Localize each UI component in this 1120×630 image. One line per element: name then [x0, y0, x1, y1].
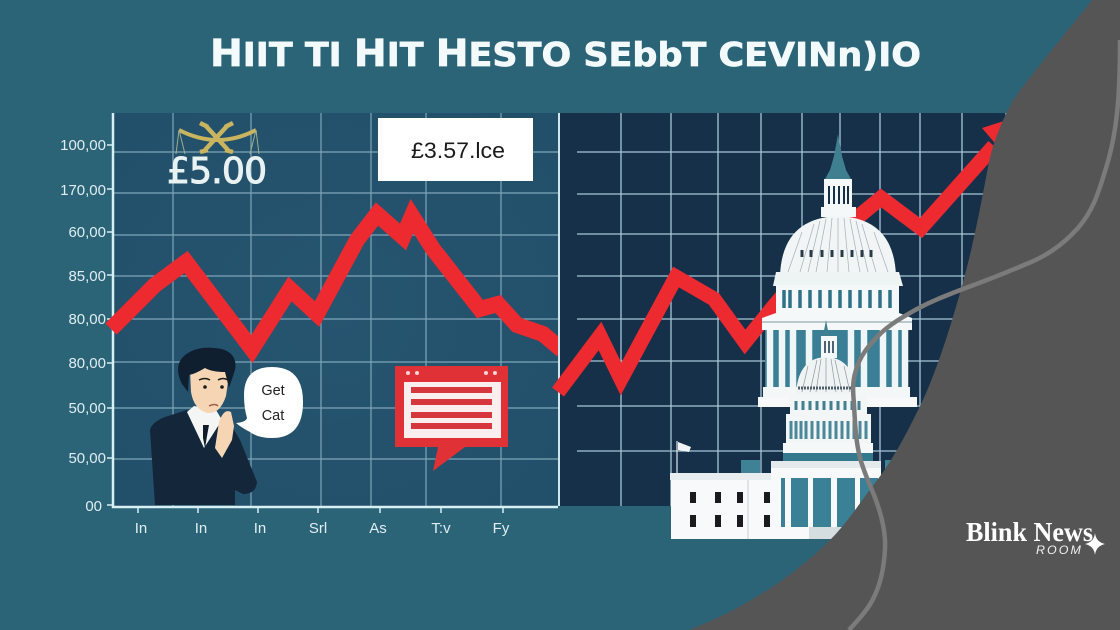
- y axis labels: 50,00: [68, 400, 106, 417]
- price box: £3.57.lce: [411, 138, 505, 163]
- red arrow: rising: [558, 120, 1007, 392]
- title: HIIT TI HIT HESTO SEbbT CEVINn)IO: [210, 32, 921, 75]
- y axis labels: 80,00: [68, 311, 106, 328]
- illustration: small capitol and wings: [670, 320, 905, 539]
- speech bubble: Cat: [262, 408, 284, 424]
- logo: Blink News: [966, 517, 1093, 547]
- decorative curve line: [849, 40, 1120, 630]
- speech bubble: Get: [261, 383, 285, 399]
- panel: left chart: [60, 113, 562, 537]
- price label: 5.00: £5.00: [167, 151, 267, 192]
- background: grey curved shape: [689, 0, 1120, 630]
- x axis labels: In: [254, 520, 266, 537]
- icon: red message window: [395, 366, 508, 471]
- price box: [378, 118, 533, 181]
- flag: [677, 441, 691, 473]
- y axis labels: 50,00: [68, 450, 106, 467]
- y axis labels: 100,00: [60, 137, 106, 154]
- icon: gold scales: [176, 123, 259, 154]
- panel: right chart: [558, 113, 1030, 506]
- x axis labels: Fy: [493, 520, 510, 537]
- x axis labels: In: [195, 520, 207, 537]
- icon: sparkle: [1085, 533, 1105, 555]
- y axis labels: 85,00: [68, 268, 106, 285]
- y axis labels: [60, 137, 106, 515]
- y axis labels: 170,00: [60, 182, 106, 199]
- y axis labels: 80,00: [68, 355, 106, 372]
- x axis labels: In: [135, 520, 147, 537]
- red line: left: [111, 214, 562, 350]
- logo: ROOM: [1036, 543, 1083, 557]
- icon: worried businessman: [150, 348, 303, 505]
- x axis labels: T:v: [431, 520, 451, 537]
- y axis labels: 60,00: [68, 224, 106, 241]
- y axis labels: 00: [85, 498, 102, 515]
- speech bubble: [236, 367, 303, 438]
- x axis labels: [135, 520, 510, 537]
- x axis labels: Srl: [309, 520, 327, 537]
- x axis labels: As: [369, 520, 387, 537]
- illustration: large capitol: [758, 134, 917, 407]
